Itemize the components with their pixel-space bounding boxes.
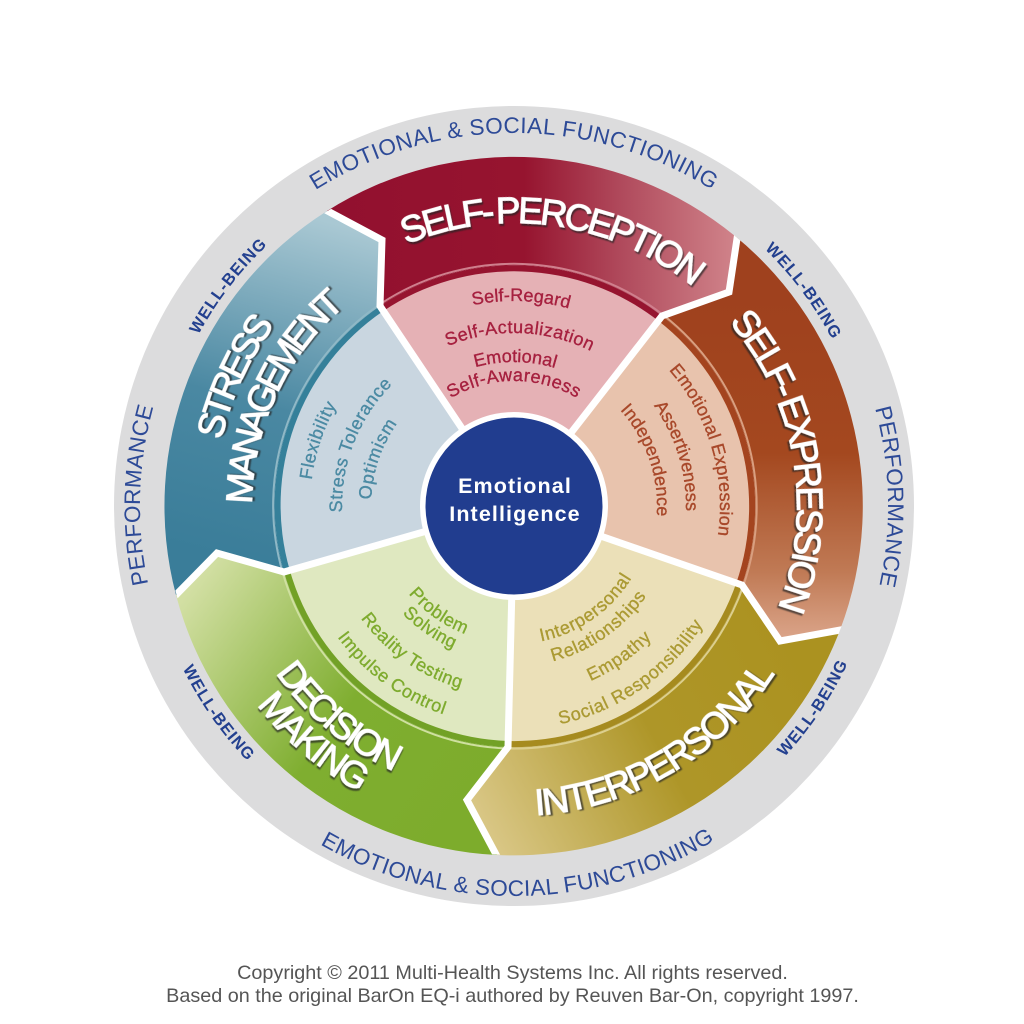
text block: self-expression skills — [620, 363, 734, 536]
skill: emotional expression: Emotional Expression — [670, 363, 734, 536]
skill: empathy: Empathy — [586, 631, 650, 681]
copyright footer — [166, 962, 859, 1007]
skill: social responsibility: Social Responsibility — [558, 619, 703, 724]
skill: flexibility: Flexibility — [300, 400, 337, 479]
skill: problem: Problem — [409, 586, 468, 634]
skill: optimism: Optimism — [358, 420, 397, 498]
ring label: bottom functioning: EMOTIONAL & SOCIAL FUNCTIONING — [322, 830, 712, 896]
skill: solving: Solving — [404, 606, 456, 650]
text block: stress management skills — [300, 380, 397, 512]
panel: stress management inner wedge — [273, 305, 514, 572]
centre circle: emotional intelligence: Emotional — [458, 474, 572, 498]
title: self-perception: SELF-PERCEPTION — [400, 196, 708, 288]
text block: self-perception skills — [445, 288, 594, 397]
ring label: performance left: PERFORMANCE — [124, 404, 154, 586]
ring label: performance right: PERFORMANCE — [876, 406, 904, 588]
text block: decision making skills — [338, 586, 468, 714]
panel: self-expression outer band — [662, 236, 863, 641]
ring label: well-being top left: WELL-BEING — [188, 240, 266, 332]
panel: self-perception inner wedge — [379, 264, 663, 506]
ring label: well-being bottom left: WELL-BEING — [184, 663, 254, 759]
outer grey ring: emotional and social functioning — [114, 106, 914, 906]
skill: impulse control: Impulse Control — [338, 630, 447, 714]
skill: interpersonal: Interpersonal — [540, 572, 631, 642]
centre circle: emotional intelligence — [420, 412, 608, 600]
title line: making: MAKING — [257, 690, 368, 792]
skill: relationships: Relationships — [550, 592, 645, 662]
skill: self-regard: Self-Regard — [472, 288, 572, 308]
ring label: well-being bottom right: WELL-BEING — [776, 660, 846, 755]
ring label: well-being top right: WELL-BEING — [766, 241, 840, 338]
skill: emotional: Emotional — [474, 348, 558, 368]
title line: decision: DECISION — [276, 659, 404, 774]
skill: self-awareness: Self-Awareness — [447, 370, 580, 397]
skill: independence: Independence — [620, 402, 667, 516]
skill: stress tolerance: Stress Tolerance — [329, 380, 390, 512]
panel: decision making inner wedge — [283, 506, 514, 748]
panel: self-perception outer band — [327, 157, 735, 316]
skill: self-actualization: Self-Actualization — [445, 321, 594, 351]
panel: interpersonal inner wedge — [508, 506, 743, 749]
title: stress management — [198, 286, 342, 502]
copyright footer: Based on the original BarOn EQ-i authored by Reuven Bar-On, copyright 1997. — [166, 985, 859, 1007]
text block: interpersonal skills — [540, 572, 703, 724]
panel: interpersonal outer band — [467, 585, 840, 855]
panel: self-expression inner wedge — [514, 315, 757, 586]
centre circle: emotional intelligence: Intelligence — [449, 502, 581, 526]
title line: management: MANAGEMENT — [226, 286, 342, 502]
title: interpersonal: INTERPERSONAL — [536, 670, 778, 818]
skill: reality testing: Reality Testing — [362, 612, 462, 691]
title: self-expression: SELF-EXPRESSION — [730, 310, 824, 616]
panel: decision making outer band — [176, 553, 508, 855]
panel: stress management outer band — [164, 211, 382, 595]
copyright footer: Copyright © 2011 Multi-Health Systems Inc. All rights reserved. — [237, 962, 788, 984]
title line: stress: STRESS — [198, 313, 274, 438]
ring label: top functioning: EMOTIONAL & SOCIAL FUNCTIONING — [309, 117, 717, 190]
skill: assertiveness: Assertiveness — [654, 402, 696, 510]
title: decision making — [257, 659, 404, 792]
